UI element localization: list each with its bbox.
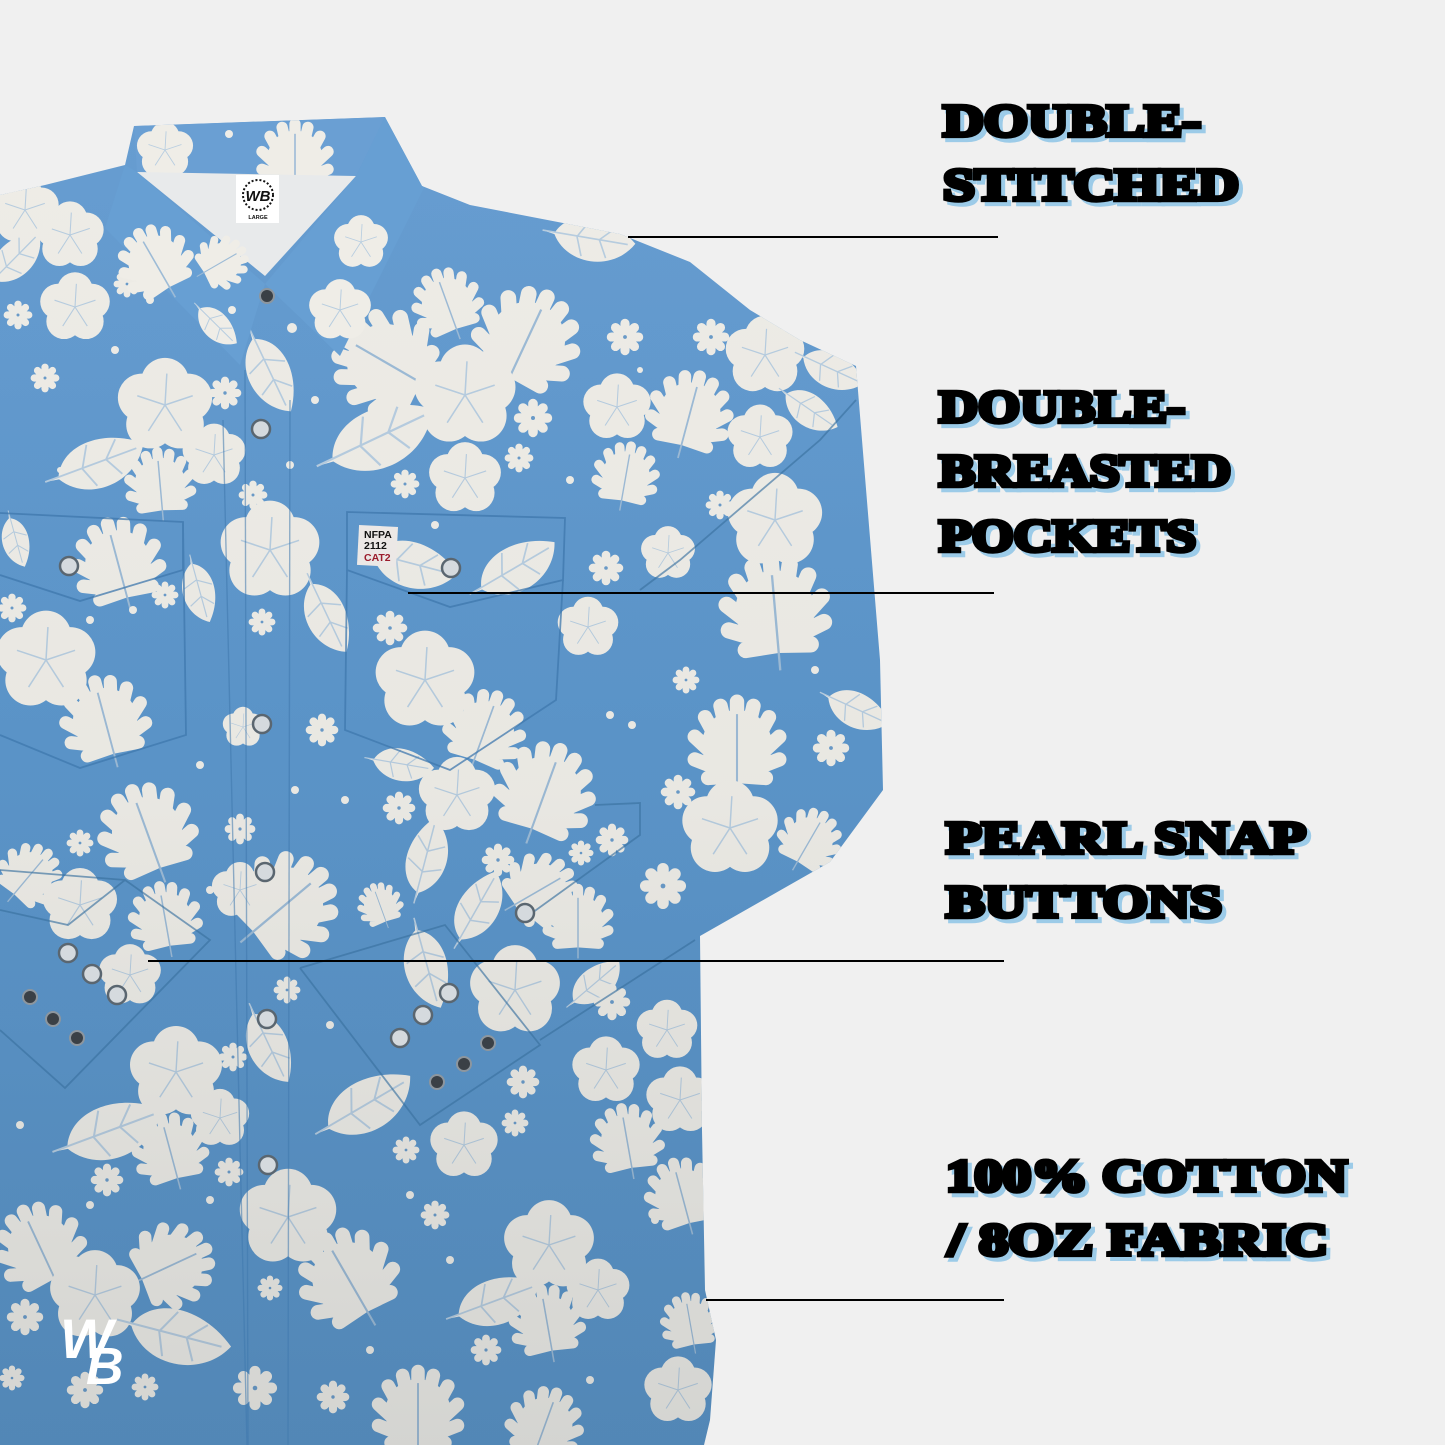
- heading: double-breasted pockets: BREASTED: [943, 449, 1235, 500]
- heading: 100% cotton / 8oz fabric: / 8OZ FABRIC: [947, 1214, 1328, 1265]
- leader line: fabric: [706, 1299, 1004, 1301]
- heading: 100% cotton / 8oz fabric: 100% COTTON: [946, 1150, 1347, 1201]
- placket seams: [223, 370, 290, 1445]
- heading: double-breasted pockets: POCKETS: [943, 514, 1200, 565]
- heading: double-stitched: DOUBLE-: [947, 99, 1205, 150]
- heading: 100% cotton / 8oz fabric: [946, 1150, 1351, 1269]
- heading: double-stitched: STITCHED: [943, 159, 1239, 210]
- NFPA patch: [357, 525, 398, 567]
- size label: [236, 175, 279, 223]
- pattern: small daisies: [1, 274, 845, 1409]
- heading: double-stitched: STITCHED: [947, 163, 1243, 214]
- NFPA patch: NFPA: [364, 529, 392, 541]
- pattern: hibiscus flowers: [0, 176, 822, 1421]
- heading: pearl snap buttons: BUTTONS: [950, 880, 1226, 931]
- heading: pearl snap buttons: PEARL SNAP: [946, 812, 1306, 863]
- watermark logo: W: [60, 1307, 117, 1370]
- leader line: pockets: [408, 592, 994, 594]
- heading: 100% cotton / 8oz fabric: 100% COTTON: [950, 1154, 1351, 1205]
- heading: pearl snap buttons: BUTTONS: [946, 876, 1222, 927]
- size label: WB: [246, 188, 271, 205]
- pattern: banana leaves: [0, 206, 895, 1380]
- heading: double-breasted pockets: DOUBLE-: [943, 385, 1189, 436]
- heading: double-breasted pockets: POCKETS: [939, 510, 1196, 561]
- heading: pearl snap buttons: PEARL SNAP: [950, 816, 1310, 867]
- pattern: monstera leaves: [0, 263, 848, 1445]
- heading: pearl snap buttons: [946, 812, 1310, 931]
- snap buttons: [23, 289, 534, 1174]
- collar: [105, 117, 424, 365]
- sleeve edges and cuffs: [0, 400, 856, 1125]
- leader line: double-stitched: [628, 236, 998, 238]
- NFPA patch: CAT2: [364, 552, 391, 564]
- NFPA patch: 2112: [364, 540, 387, 552]
- right chest pocket with flap: [345, 512, 565, 770]
- heading: double-breasted pockets: BREASTED: [939, 445, 1231, 496]
- heading: double-stitched: DOUBLE-: [943, 95, 1201, 146]
- heading: 100% cotton / 8oz fabric: / 8OZ FABRIC: [951, 1218, 1332, 1269]
- watermark logo: B: [86, 1338, 124, 1396]
- leader line: pearl snap buttons: [148, 960, 1004, 962]
- heading: double-breasted pockets: [939, 381, 1235, 565]
- heading: double-breasted pockets: DOUBLE-: [939, 381, 1185, 432]
- photo: floral western shirt: [0, 0, 900, 1445]
- heading: double-stitched: [943, 95, 1243, 214]
- watermark logo: [64, 1320, 122, 1384]
- pattern: dots: [16, 226, 819, 1384]
- left chest pocket: [0, 513, 186, 768]
- size label: LARGE: [248, 215, 268, 221]
